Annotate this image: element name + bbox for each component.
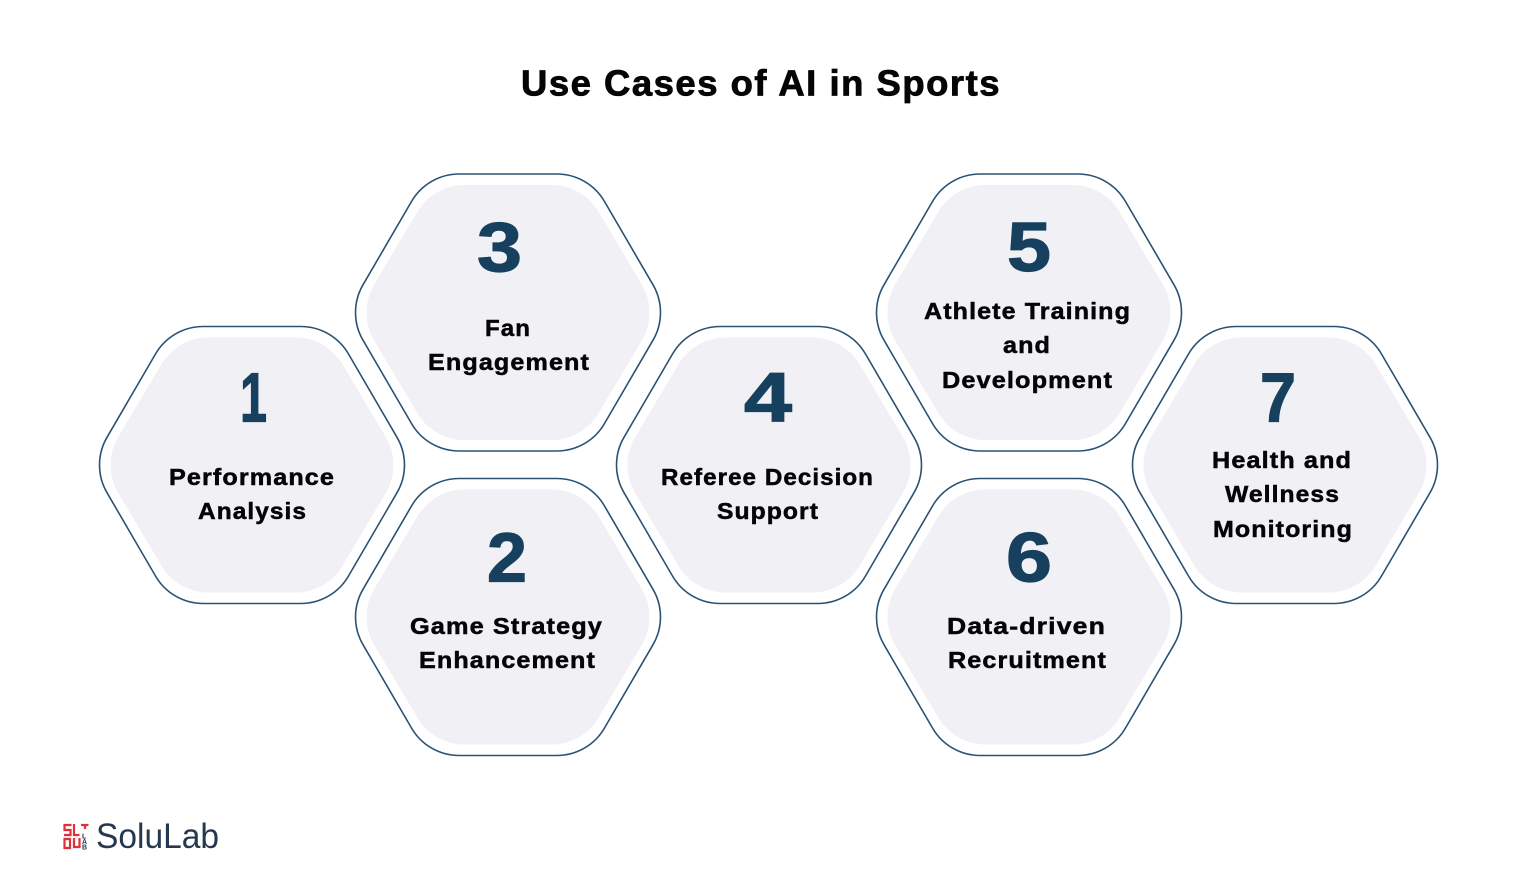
hexagon 7: Health and Wellness Monitoring: 7 [1260, 358, 1296, 436]
hexagon 5: Athlete Training and Development: 5 [1007, 208, 1051, 286]
hexagon 7: Health and Wellness Monitoring: Wellness [1225, 481, 1340, 507]
hexagon 6: Data-driven Recruitment: Data-driven [947, 613, 1106, 639]
hexagon 4: Referee Decision Support [617, 326, 921, 604]
hexagon 1: Performance Analysis [100, 326, 404, 604]
icon: logo mark: L [82, 834, 87, 840]
hexagon 5: Athlete Training and Development: Athlete Training [924, 298, 1131, 324]
hexagon 6: Data-driven Recruitment: Recruitment [948, 647, 1107, 673]
hexagon 2: Game Strategy Enhancement: Enhancement [419, 647, 596, 673]
icon: logo mark: B [82, 844, 87, 852]
hexagon 2: Game Strategy Enhancement: 2 [487, 518, 527, 596]
hexagon 4: Referee Decision Support: 4 [744, 358, 792, 436]
logo: SoluLab: SoluLab [96, 817, 219, 856]
hexagon 2: Game Strategy Enhancement [356, 478, 660, 756]
icon: logo mark [64, 824, 88, 852]
hexagon 5: Athlete Training and Development: Development [942, 367, 1113, 393]
hexagon 3: Fan Engagement [356, 174, 660, 451]
hexagon 5: Athlete Training and Development: and [1003, 332, 1051, 358]
hexagon 2: Game Strategy Enhancement: Game Strategy [410, 613, 603, 639]
title: Use Cases of AI in Sports [521, 62, 1001, 104]
hexagon 7: Health and Wellness Monitoring: Health and [1212, 447, 1352, 473]
hexagon 3: Fan Engagement: Engagement [428, 349, 590, 375]
hexagon 4: Referee Decision Support: Referee Decision [661, 464, 874, 490]
hexagon 1: Performance Analysis: Analysis [198, 498, 307, 524]
hexagon 1: Performance Analysis: 1 [240, 358, 267, 436]
hexagon 1: Performance Analysis: Performance [169, 464, 335, 490]
hexagon 6: Data-driven Recruitment [877, 478, 1181, 756]
hexagon 7: Health and Wellness Monitoring [1133, 326, 1437, 604]
hexagon 3: Fan Engagement: Fan [485, 315, 531, 341]
hexagon 5: Athlete Training and Development [877, 174, 1181, 451]
icon: logo mark: A [82, 839, 87, 846]
hexagon 4: Referee Decision Support: Support [717, 498, 819, 524]
hexagon 7: Health and Wellness Monitoring: Monitoring [1213, 516, 1353, 542]
hexagon 3: Fan Engagement: 3 [477, 208, 522, 286]
hexagon 6: Data-driven Recruitment: 6 [1006, 518, 1052, 596]
